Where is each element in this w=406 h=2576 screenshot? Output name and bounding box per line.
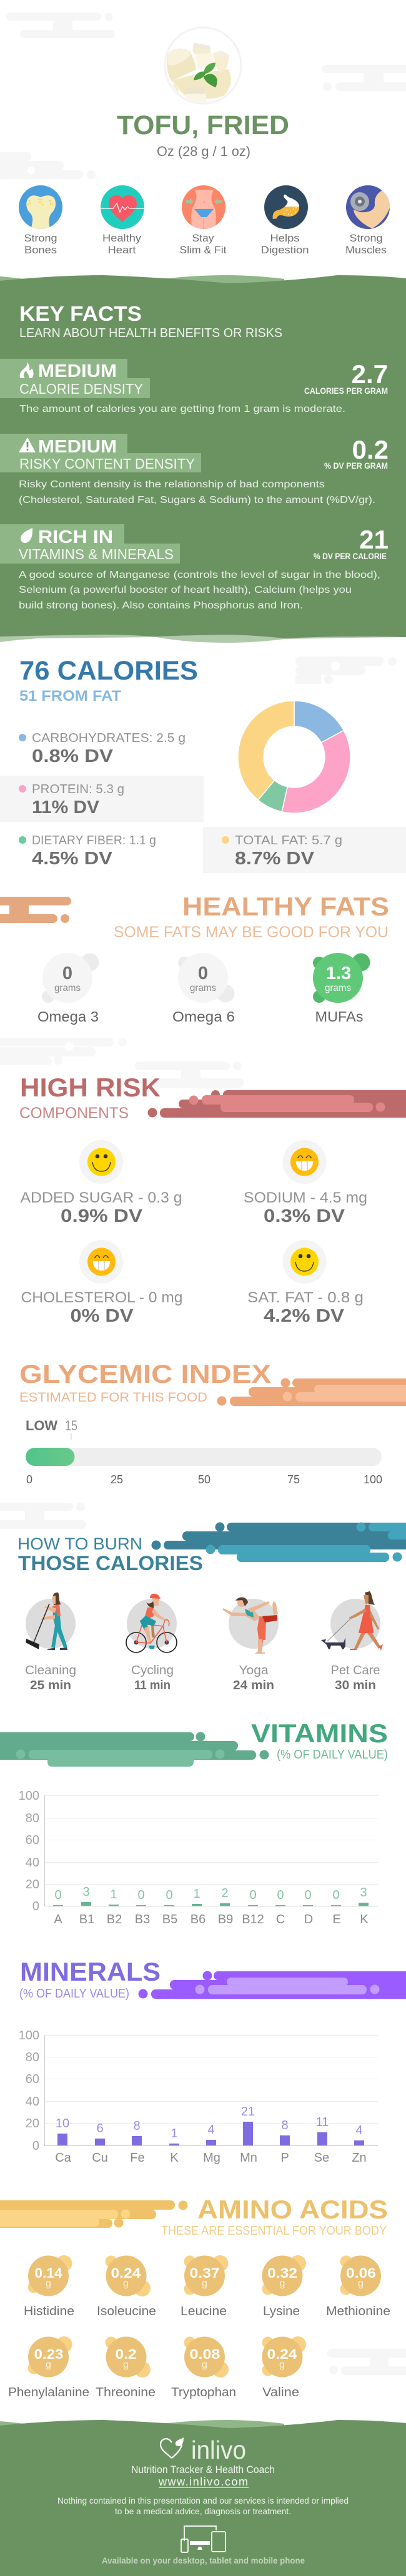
- bar chart: vitamins: B5: [162, 1913, 177, 1926]
- fact: rich in vitamins and minerals: VITAMINS & MINERALS: [19, 546, 174, 562]
- legend: protein: 11% DV: [32, 798, 100, 817]
- label: cycling: 11 min: [134, 1679, 171, 1692]
- bar chart: vitamins: B6: [191, 1913, 205, 1926]
- amino: histidine: g: [46, 2278, 51, 2289]
- bar chart: minerals: Cu: [92, 2151, 108, 2165]
- benefit labels: Stay: [192, 232, 214, 244]
- panel: healthy fats: [0, 892, 389, 1025]
- logo: inlivo heart and leaf: [161, 2437, 184, 2458]
- label: yoga: Yoga: [239, 1664, 269, 1677]
- footer: [0, 2420, 406, 2576]
- decorative bars: [139, 1971, 406, 1999]
- benefit labels: Helps: [270, 232, 300, 244]
- decorative bars: [147, 1090, 406, 1118]
- bar chart: vitamins: C: [276, 1913, 285, 1926]
- amino: leucine: [181, 2255, 229, 2318]
- legend: protein: PROTEIN: 5.3 g: [32, 783, 124, 796]
- label: cleaning: [25, 1664, 76, 1692]
- legend: total fat: [203, 827, 406, 873]
- benefit labels: Strong: [24, 232, 57, 244]
- fact: rich in vitamins and minerals: Selenium (a powerful booster of heart health), Calcium (helps you: [19, 585, 352, 595]
- gauge scale: 25: [111, 1473, 123, 1486]
- glycemic value: [26, 1418, 77, 1440]
- bar chart: vitamins: 100: [19, 1789, 39, 1803]
- amino: methionine: g: [358, 2278, 364, 2289]
- amino: histidine: Histidine: [24, 2305, 74, 2318]
- donut chart: [238, 701, 350, 813]
- amino: phenylalanine: [8, 2336, 89, 2399]
- amino: threonine: [96, 2336, 156, 2399]
- item: sodium: SODIUM - 4.5 mg: [244, 1189, 367, 1206]
- bar chart: vitamins: [19, 1789, 378, 1926]
- amino: histidine: 0.14: [35, 2265, 62, 2281]
- subheading: (% OF DAILY VALUE): [277, 1748, 388, 1762]
- bar chart: vitamins: D: [304, 1913, 313, 1926]
- tagline: Nutrition Tracker & Health Coach: [131, 2464, 275, 2476]
- bar chart: vitamins: 0: [277, 1888, 284, 1902]
- serving size: Oz (28 g / 1 oz): [157, 144, 250, 159]
- amino: valine: g: [279, 2359, 285, 2370]
- bar chart: vitamins: 60: [26, 1833, 39, 1847]
- fact: risky content density: [0, 434, 389, 505]
- item: cholesterol: [21, 1240, 182, 1326]
- fact: calorie density: MEDIUM: [38, 361, 117, 381]
- amino: valine: [262, 2336, 306, 2399]
- legend: carbohydrates: CARBOHYDRATES: 2.5 g: [32, 731, 186, 745]
- benefit labels: Strong: [350, 232, 382, 244]
- bar chart: minerals: 11: [316, 2115, 329, 2129]
- benefit labels: Muscles: [345, 244, 387, 256]
- amino: lysine: [262, 2255, 306, 2318]
- label: cleaning: 25 min: [30, 1679, 71, 1692]
- heading: KEY FACTS: [19, 302, 142, 325]
- bar chart: minerals: 4: [207, 2123, 215, 2137]
- gauge scale: 50: [198, 1473, 210, 1486]
- bar chart: vitamins: E: [332, 1913, 341, 1926]
- item: saturated fat: [247, 1240, 364, 1326]
- fact: calorie density: 2.7: [352, 359, 388, 389]
- bar chart: minerals: 8: [281, 2119, 289, 2132]
- amino: leucine: 0.37: [190, 2265, 220, 2281]
- legend: dietary fiber: [19, 834, 156, 869]
- panel: high risk: [19, 1073, 406, 1326]
- title: TOFU, FRIED: [117, 110, 289, 140]
- legend: total fat: TOTAL FAT: 5.7 g: [235, 834, 342, 847]
- bar chart: minerals: 1: [171, 2127, 178, 2140]
- amino: valine: Valine: [262, 2386, 299, 2399]
- bar chart: minerals: 10: [56, 2117, 69, 2130]
- bar chart: vitamins: B9: [218, 1913, 233, 1926]
- amino: isoleucine: [97, 2255, 156, 2318]
- bar chart: minerals: Zn: [352, 2151, 367, 2165]
- header background clouds: [0, 12, 406, 179]
- amino: methionine: [326, 2255, 390, 2318]
- amino: threonine: 0.2: [115, 2346, 136, 2362]
- bar chart: minerals: 21: [241, 2105, 255, 2119]
- bar chart: minerals: 0: [32, 2139, 39, 2153]
- disclaimer: [57, 2496, 349, 2516]
- benefit labels: Digestion: [261, 244, 309, 256]
- fact: calorie density: The amount of calories you are getting from 1 gram is moderate.: [19, 404, 345, 414]
- legend: carbohydrates: [19, 731, 186, 766]
- heading: GLYCEMIC INDEX: [19, 1359, 271, 1388]
- panel: how to burn: [17, 1523, 406, 1692]
- bar chart: vitamins: 20: [26, 1878, 39, 1891]
- bar chart: vitamins: 0: [137, 1888, 145, 1902]
- website link: www.inlivo.com: [158, 2476, 248, 2488]
- bar chart: minerals: [19, 2029, 378, 2165]
- legend: protein: [0, 776, 204, 822]
- stat: omega 3: 0: [62, 964, 72, 983]
- decorative bars: [0, 1732, 269, 1767]
- fact: risky content density: RISKY CONTENT DENSITY: [19, 456, 195, 472]
- subheading: ESTIMATED FOR THIS FOOD: [19, 1390, 207, 1405]
- heading: 76 CALORIES: [19, 656, 198, 686]
- amino: leucine: g: [202, 2278, 207, 2289]
- activity: cycling: [126, 1594, 177, 1652]
- amino: lysine: Lysine: [263, 2305, 300, 2318]
- bar chart: minerals: Ca: [55, 2151, 72, 2165]
- icon: flame: [20, 362, 34, 378]
- amino: valine: 0.24: [267, 2346, 297, 2362]
- fact: rich in vitamins and minerals: build strong bones). Also contains Phosphorus and Iron.: [19, 600, 303, 611]
- benefit labels: Heart: [107, 244, 136, 256]
- icon: devices: [181, 2526, 225, 2552]
- amino: tryptophan: [171, 2336, 236, 2399]
- amino: lysine: 0.32: [267, 2265, 297, 2281]
- bar chart: vitamins: B12: [242, 1913, 264, 1926]
- label: pet care: [331, 1664, 380, 1692]
- bar chart: minerals: P: [280, 2151, 289, 2165]
- bar chart: vitamins: B3: [135, 1913, 150, 1926]
- benefits row: [19, 185, 392, 256]
- heading: VITAMINS: [251, 1719, 388, 1748]
- amino: isoleucine: Isoleucine: [97, 2305, 156, 2318]
- bar chart: minerals: 60: [26, 2072, 39, 2086]
- heading: HEALTHY FATS: [182, 892, 389, 921]
- bar chart: vitamins: 1: [193, 1887, 201, 1901]
- subheading: SOME FATS MAY BE GOOD FOR YOU: [114, 924, 389, 941]
- item: cholesterol: 0% DV: [70, 1306, 134, 1326]
- bar chart: vitamins: 0: [332, 1888, 340, 1902]
- icon: healthy heart: [101, 185, 144, 229]
- panel: vitamins: [0, 1719, 388, 1926]
- amino: phenylalanine: g: [46, 2359, 51, 2370]
- panel: how to burn: THOSE CALORIES: [18, 1552, 203, 1574]
- item: sodium: 0.3% DV: [264, 1206, 345, 1226]
- item: saturated fat: 4.2% DV: [264, 1306, 345, 1326]
- gauge scale: 0: [26, 1473, 32, 1486]
- benefit labels: Slim & Fit: [180, 244, 227, 256]
- background cloud: [295, 656, 397, 684]
- fact: rich in vitamins and minerals: A good source of Manganese (controls the level of sugar in the blood),: [19, 570, 380, 580]
- amino: phenylalanine: 0.23: [34, 2346, 64, 2362]
- decorative bars: [217, 1378, 406, 1406]
- bar chart: minerals: Se: [314, 2151, 329, 2165]
- item: added sugar: [20, 1140, 182, 1226]
- bar chart: minerals: Mg: [203, 2151, 220, 2165]
- label: pet care: 30 min: [335, 1679, 376, 1692]
- disclaimer: Nothing contained in this presentation and our services is intended or implied: [57, 2496, 349, 2505]
- label: pet care: Pet Care: [331, 1664, 380, 1677]
- disclaimer: to be a medical advice, diagnosis or treatment.: [115, 2506, 291, 2516]
- gauge scale: 75: [287, 1473, 300, 1486]
- label: cycling: [131, 1664, 174, 1692]
- bar chart: vitamins: 3: [360, 1886, 367, 1900]
- amino: tryptophan: 0.08: [190, 2346, 220, 2362]
- bar chart: vitamins: 0: [32, 1900, 39, 1913]
- panel: minerals: [19, 1957, 406, 2165]
- panel: key facts: [0, 275, 406, 643]
- fact: risky content density: 0.2: [352, 435, 389, 464]
- gauge scale: [26, 1473, 382, 1486]
- amino: methionine: 0.06: [346, 2265, 376, 2281]
- activity: cleaning: [26, 1593, 76, 1650]
- bar chart: vitamins: 0: [166, 1888, 173, 1902]
- background cloud above burn section: [0, 1503, 86, 1529]
- panel: glycemic index: [19, 1359, 406, 1486]
- item: added sugar: 0.9% DV: [61, 1206, 143, 1226]
- label: yoga: [233, 1664, 274, 1692]
- stat: omega 6: grams: [190, 983, 216, 993]
- benefit labels: [24, 232, 387, 256]
- glycemic value: 15: [65, 1418, 77, 1433]
- panel: calories: [0, 656, 406, 873]
- bar chart: minerals: 100: [19, 2029, 39, 2042]
- item: cholesterol: CHOLESTEROL - 0 mg: [21, 1289, 182, 1306]
- bar chart: vitamins: 40: [26, 1856, 39, 1870]
- bar chart: vitamins: B2: [107, 1913, 122, 1926]
- bar chart: vitamins: B1: [79, 1913, 94, 1926]
- bar chart: vitamins: K: [360, 1913, 369, 1926]
- amino: histidine: [24, 2255, 74, 2318]
- fact: risky content density: % DV PER GRAM: [324, 461, 388, 471]
- subheading: LEARN ABOUT HEALTH BENEFITS OR RISKS: [19, 326, 282, 340]
- bar chart: vitamins: 0: [249, 1888, 257, 1902]
- availability note: Available on your desktop, tablet and mobile phone: [102, 2555, 305, 2565]
- icon: strong muscles: [346, 185, 392, 229]
- label: cleaning: Cleaning: [25, 1664, 76, 1677]
- stat: omega 6: 0: [198, 964, 208, 983]
- benefit labels: Bones: [24, 244, 57, 256]
- fact: risky content density: MEDIUM: [38, 437, 117, 457]
- decorative bars: [0, 897, 71, 923]
- bar chart: minerals: K: [170, 2151, 179, 2165]
- fact: risky content density: (Cholesterol, Saturated Fat, Sugars & Sodium) to the amount (%DV/gr).: [19, 495, 375, 505]
- bar chart: minerals: 20: [26, 2117, 39, 2130]
- subheading: (% OF DAILY VALUE): [19, 1987, 129, 2001]
- heading: AMINO ACIDS: [197, 2195, 388, 2224]
- amino: isoleucine: 0.24: [111, 2265, 141, 2281]
- amino: tryptophan: Tryptophan: [171, 2386, 236, 2399]
- gauge scale: 100: [364, 1473, 382, 1486]
- subheading: 51 FROM FAT: [19, 688, 121, 705]
- bar chart: vitamins: 3: [82, 1885, 90, 1899]
- bar chart: vitamins: 2: [221, 1886, 229, 1900]
- heading: MINERALS: [20, 1957, 161, 1986]
- bar chart: minerals: 6: [96, 2122, 104, 2135]
- bar chart: minerals: 8: [133, 2119, 141, 2133]
- subheading: COMPONENTS: [19, 1105, 129, 1122]
- amino: tryptophan: g: [202, 2359, 207, 2370]
- heading: HIGH RISK: [20, 1073, 161, 1102]
- gauge: [26, 1448, 382, 1466]
- amino: threonine: Threonine: [96, 2386, 156, 2399]
- amino: leucine: Leucine: [181, 2305, 227, 2318]
- benefit labels: Healthy: [102, 232, 142, 244]
- food photo: fried tofu: [165, 27, 241, 104]
- decorative bars: [151, 1523, 406, 1562]
- stat: omega 3: grams: [54, 983, 81, 993]
- amino: isoleucine: g: [123, 2278, 129, 2289]
- stat: MUFAs: MUFAs: [315, 1008, 364, 1025]
- stat: omega 6: [172, 953, 235, 1025]
- stat: omega 6: Omega 6: [172, 1008, 235, 1025]
- heading: HOW TO BURN: [17, 1534, 142, 1553]
- label: cycling: Cycling: [131, 1664, 174, 1677]
- stat: MUFAs: 1.3: [326, 964, 351, 983]
- fact: rich in vitamins and minerals: % DV PER CALORIE: [314, 552, 387, 561]
- bar chart: vitamins: 0: [54, 1888, 62, 1902]
- item: sodium: [244, 1140, 367, 1226]
- bar chart: minerals: 4: [355, 2124, 363, 2137]
- item: added sugar: ADDED SUGAR - 0.3 g: [20, 1189, 182, 1206]
- fact: risky content density: Risky Content density is the relationship of bad components: [19, 479, 325, 490]
- icon: stay slim: [182, 185, 225, 229]
- bar chart: minerals: 40: [26, 2095, 39, 2109]
- fact: calorie density: CALORIES PER GRAM: [304, 386, 388, 396]
- subheading: THESE ARE ESSENTIAL FOR YOUR BODY: [161, 2224, 387, 2238]
- panel: amino acids: [0, 2195, 406, 2399]
- bar chart: minerals: 80: [26, 2051, 39, 2064]
- decorative bars: [0, 2200, 187, 2228]
- label: yoga: 24 min: [233, 1679, 274, 1692]
- fact: calorie density: [0, 359, 388, 414]
- bar chart: vitamins: 0: [304, 1888, 312, 1902]
- amino: methionine: Methionine: [326, 2305, 390, 2318]
- legend: dietary fiber: 4.5% DV: [32, 849, 113, 869]
- fact: rich in vitamins and minerals: RICH IN: [38, 527, 113, 547]
- bar chart: vitamins: A: [54, 1913, 62, 1926]
- icon: leaf: [21, 528, 32, 543]
- icon: strong bones: [19, 185, 62, 229]
- icon: warning triangle: [19, 437, 36, 452]
- icon: helps digestion: [264, 185, 308, 229]
- fact: calorie density: CALORIE DENSITY: [19, 381, 143, 397]
- activity: yoga: [223, 1598, 279, 1654]
- stat: omega 3: Omega 3: [37, 1008, 99, 1025]
- glycemic value: LOW: [26, 1418, 57, 1433]
- legend: dietary fiber: DIETARY FIBER: 1.1 g: [32, 834, 156, 847]
- item: saturated fat: SAT. FAT - 0.8 g: [247, 1289, 364, 1306]
- bar chart: vitamins: 1: [110, 1888, 117, 1901]
- bar chart: vitamins: 80: [26, 1812, 39, 1825]
- logo wordmark: inlivo: [191, 2436, 246, 2464]
- legend: total fat: 8.7% DV: [235, 849, 315, 869]
- stat: omega 3: [37, 953, 99, 1025]
- amino: threonine: g: [123, 2359, 129, 2370]
- legend: carbohydrates: 0.8% DV: [32, 746, 114, 766]
- fact: rich in vitamins and minerals: 21: [359, 525, 389, 554]
- stat: MUFAs: [313, 953, 370, 1025]
- activity: pet care: [321, 1591, 383, 1651]
- bar chart: minerals: Mn: [240, 2151, 257, 2165]
- amino: lysine: g: [280, 2278, 285, 2289]
- amino: phenylalanine: Phenylalanine: [8, 2386, 89, 2399]
- stat: MUFAs: grams: [325, 983, 351, 993]
- fact: rich in vitamins and minerals: [0, 524, 389, 611]
- background cloud: [327, 2349, 406, 2375]
- bar chart: minerals: Fe: [130, 2151, 145, 2165]
- background clouds above high risk: [0, 1038, 244, 1088]
